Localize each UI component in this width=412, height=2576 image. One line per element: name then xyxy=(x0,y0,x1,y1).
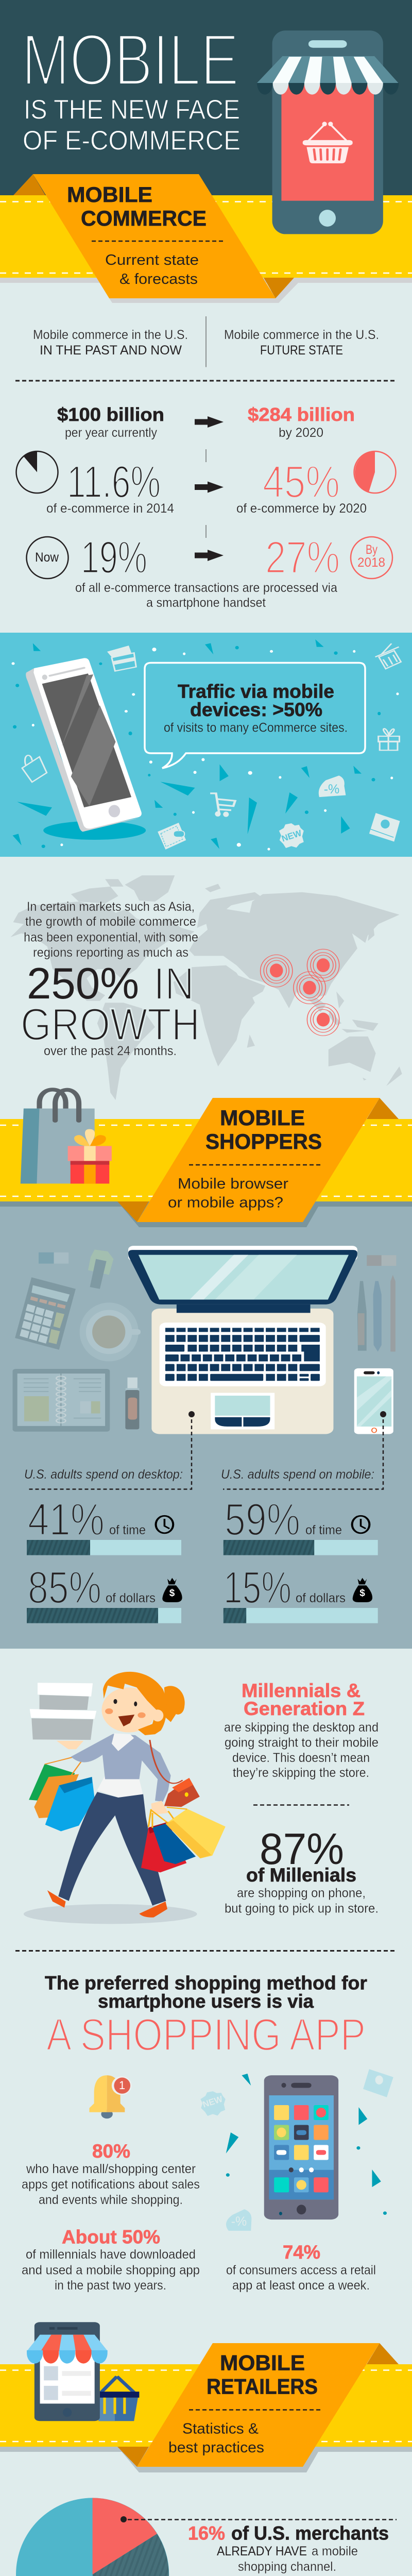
map markers: Asia hot spots xyxy=(261,949,339,1036)
text block: Asia growth: GROWTH xyxy=(21,998,200,1050)
ribbon: mobile retailers xyxy=(117,2343,399,2472)
pie chart: merchants with mobile channel xyxy=(16,2498,169,2576)
money bag dollar labels: $ xyxy=(359,1588,365,1599)
stat row: revenue xyxy=(57,404,355,440)
icons: shopping glyphs xyxy=(22,643,401,850)
stat row: handset transactions: 19% xyxy=(81,532,147,583)
heading: preferred shopping method xyxy=(45,1972,367,2060)
text block: Asia growth: In certain markets such as Asia, xyxy=(27,900,195,914)
icon: smartphone with apps xyxy=(200,2069,393,2231)
stat row: handset transactions: a smartphone handset xyxy=(146,596,266,610)
arrow: revenue xyxy=(195,416,224,428)
text block: millennials: Generation Z xyxy=(244,1698,365,1719)
stats: desktop vs mobile: of time xyxy=(109,1523,146,1537)
text block: notification and download stats: app at least once a week. xyxy=(232,2278,370,2293)
stats: desktop vs mobile: of dollars xyxy=(296,1591,346,1605)
stats: desktop vs mobile xyxy=(24,1467,374,1613)
icon: smartphone with apps: -% xyxy=(231,2214,247,2229)
callout: traffic speech bubble: devices: >50% xyxy=(190,699,322,720)
ribbon: mobile shoppers: Mobile browser xyxy=(178,1176,288,1192)
stats: desktop vs mobile: 15% xyxy=(224,1562,291,1613)
main title: OF E-COMMERCE xyxy=(23,126,241,156)
callout: traffic speech bubble: of visits to many eCommerce sites. xyxy=(164,720,348,735)
stat row: share of e-commerce: of e-commerce in 2014 xyxy=(46,501,174,516)
main title: MOBILE xyxy=(22,19,239,101)
stat row: share of e-commerce xyxy=(46,456,367,516)
ribbon: mobile retailers: RETAILERS xyxy=(207,2374,318,2399)
ribbon: mobile shoppers: MOBILE xyxy=(220,1106,305,1130)
callout: traffic speech bubble: Traffic via mobile xyxy=(178,681,334,702)
text block: Asia growth: the growth of mobile commerce xyxy=(25,914,196,929)
ribbon: mobile commerce: COMMERCE xyxy=(81,206,207,230)
world map xyxy=(10,875,402,1100)
callout: merchant stats: shopping channel. xyxy=(238,2560,336,2574)
arrow: share xyxy=(195,481,224,493)
ribbon: mobile shoppers: SHOPPERS xyxy=(205,1129,322,1154)
icon: smartphone with apps: NEW xyxy=(201,2094,225,2110)
notification count: 1 xyxy=(119,2079,125,2092)
stat row: handset transactions: 2018 xyxy=(357,555,385,570)
text block: notification and download stats: of consumers access a retail xyxy=(226,2263,376,2277)
confetti xyxy=(11,639,399,851)
stats: desktop vs mobile: U.S. adults spend on desktop: xyxy=(24,1467,183,1482)
text block: notification and download stats: 80% xyxy=(92,2141,130,2162)
text block: millennials: Millennials & xyxy=(242,1680,360,1701)
badge labels: -% xyxy=(324,782,339,796)
ribbon: mobile commerce: MOBILE xyxy=(67,182,152,207)
pie: 11.6 percent xyxy=(16,451,58,493)
text block: notification and download stats: of millennials have downloaded xyxy=(26,2247,196,2262)
stat row: share of e-commerce: 11.6% xyxy=(67,456,161,507)
text block: millennials: 87% xyxy=(260,1825,344,1874)
icon: shopping bag and gift xyxy=(21,1090,112,1183)
arrow: handset xyxy=(195,550,224,561)
comparison headers: Mobile commerce in the U.S. xyxy=(224,328,379,342)
money bag dollar labels: $ xyxy=(169,1588,175,1599)
comparison headers: Mobile commerce in the U.S. xyxy=(33,328,188,342)
stat row: share of e-commerce: of e-commerce by 2020 xyxy=(236,501,367,516)
stats: desktop vs mobile: 59% xyxy=(225,1494,300,1545)
stat row: handset transactions: 27% xyxy=(265,532,340,583)
text block: Asia growth xyxy=(21,900,200,1058)
text block: notification and download stats: and events while shopping. xyxy=(39,2193,183,2207)
ribbon: mobile commerce xyxy=(13,174,298,303)
stats: desktop vs mobile: 41% xyxy=(28,1494,105,1545)
callout: merchant stats: 16% xyxy=(188,2522,225,2544)
stat row: handset transactions: of all e-commerce transactions are processed via xyxy=(75,581,337,595)
text block: millennials: they’re skipping the store. xyxy=(233,1766,369,1780)
stats: desktop vs mobile: U.S. adults spend on mobile: xyxy=(221,1467,374,1482)
callout: merchant stats xyxy=(121,2516,397,2576)
ribbon: mobile commerce: Current state xyxy=(105,252,199,268)
panel: traffic via mobile xyxy=(11,639,401,851)
text block: millennials xyxy=(224,1680,379,1916)
text block: notification and download stats: apps get notifications about sales xyxy=(22,2177,200,2192)
icon: tilted phone xyxy=(26,658,146,840)
stat row: share of e-commerce: 45% xyxy=(263,456,340,507)
ribbon: mobile retailers: Statistics & xyxy=(182,2420,259,2437)
text block: Asia growth: over the past 24 months. xyxy=(44,1044,177,1058)
stat row: handset transactions: By xyxy=(366,543,377,557)
icon: phone storefront xyxy=(257,30,399,234)
comparison headers: IN THE PAST AND NOW xyxy=(40,343,182,358)
text block: notification and download stats: who have mall/shopping center xyxy=(26,2162,196,2176)
callout: traffic speech bubble xyxy=(145,663,365,768)
text block: notification and download stats: 74% xyxy=(283,2242,320,2263)
text block: millennials: are shopping on phone, xyxy=(237,1886,366,1900)
icon: laptop xyxy=(128,1246,357,1434)
text block: notification and download stats: and used a mobile shopping app xyxy=(22,2263,200,2277)
ribbon: mobile retailers: MOBILE xyxy=(220,2350,305,2375)
stat row: revenue: $284 billion xyxy=(248,404,355,425)
icon: smartphone on desk xyxy=(354,1368,393,1434)
text block: millennials: are skipping the desktop and xyxy=(224,1720,379,1735)
icons: clocks and money bags xyxy=(156,1516,372,1602)
ribbon: mobile shoppers xyxy=(117,1098,399,1227)
callout: merchant stats: ALREADY HAVE xyxy=(217,2544,307,2558)
stat row: revenue: per year currently xyxy=(65,426,157,440)
callout: merchant stats: of U.S. merchants xyxy=(231,2522,389,2544)
stats: desktop vs mobile: 85% xyxy=(28,1562,101,1613)
badge labels: NEW xyxy=(280,828,303,844)
desk items: faded stationery xyxy=(12,1249,396,1432)
pie: 45 percent xyxy=(354,451,396,493)
text block: millennials: device. This doesn’t mean xyxy=(232,1751,370,1765)
icon: notification bell xyxy=(89,2075,132,2119)
stat row: revenue: by 2020 xyxy=(279,426,323,440)
ribbon: mobile commerce: & forecasts xyxy=(119,271,198,287)
text block: millennials: of Millenials xyxy=(246,1865,356,1886)
heading: preferred shopping method: The preferred shopping method for xyxy=(45,1972,367,1994)
text block: notification and download stats: in the past two years. xyxy=(55,2278,166,2293)
badge labels xyxy=(280,782,339,844)
text block: Asia growth: has been exponential, with some xyxy=(24,930,198,945)
comparison headers xyxy=(33,316,379,367)
heading: preferred shopping method: smartphone users is via xyxy=(98,1991,314,2012)
text block: notification and download stats xyxy=(22,2141,376,2293)
main title xyxy=(22,19,241,156)
stat row: handset transactions xyxy=(27,532,392,610)
icon: store tablet and basket xyxy=(27,2322,139,2421)
comparison headers: FUTURE STATE xyxy=(260,343,343,358)
text block: millennials: going straight to their mobile xyxy=(225,1735,379,1750)
banner: yellow band three xyxy=(0,2364,412,2452)
stats: desktop vs mobile: of dollars xyxy=(106,1591,156,1605)
text block: millennials: but going to pick up in store. xyxy=(225,1901,379,1916)
banner: yellow band one xyxy=(0,195,412,283)
stat row: revenue: $100 billion xyxy=(57,404,164,425)
text block: Asia growth: regions reporting as much as xyxy=(33,945,188,960)
text block: notification and download stats: About 50% xyxy=(62,2227,160,2247)
banner: yellow band two xyxy=(0,1119,412,1207)
text block: Asia growth: IN xyxy=(153,958,194,1009)
stat row: handset transactions: Now xyxy=(35,550,59,565)
money bag dollar labels xyxy=(169,1588,365,1599)
ribbon: mobile shoppers: or mobile apps? xyxy=(168,1194,283,1211)
connectors: device callout lines xyxy=(27,1411,386,1489)
ribbon: mobile retailers: best practices xyxy=(168,2439,264,2456)
main title: IS THE NEW FACE xyxy=(24,95,240,125)
stats: desktop vs mobile: of time xyxy=(305,1523,342,1537)
illustration: girl with shopping bags xyxy=(24,1672,226,1924)
callout: merchant stats: a mobile xyxy=(312,2544,358,2558)
text block: Asia growth: 250% xyxy=(27,959,139,1008)
bar charts: time and dollars xyxy=(27,1540,378,1623)
